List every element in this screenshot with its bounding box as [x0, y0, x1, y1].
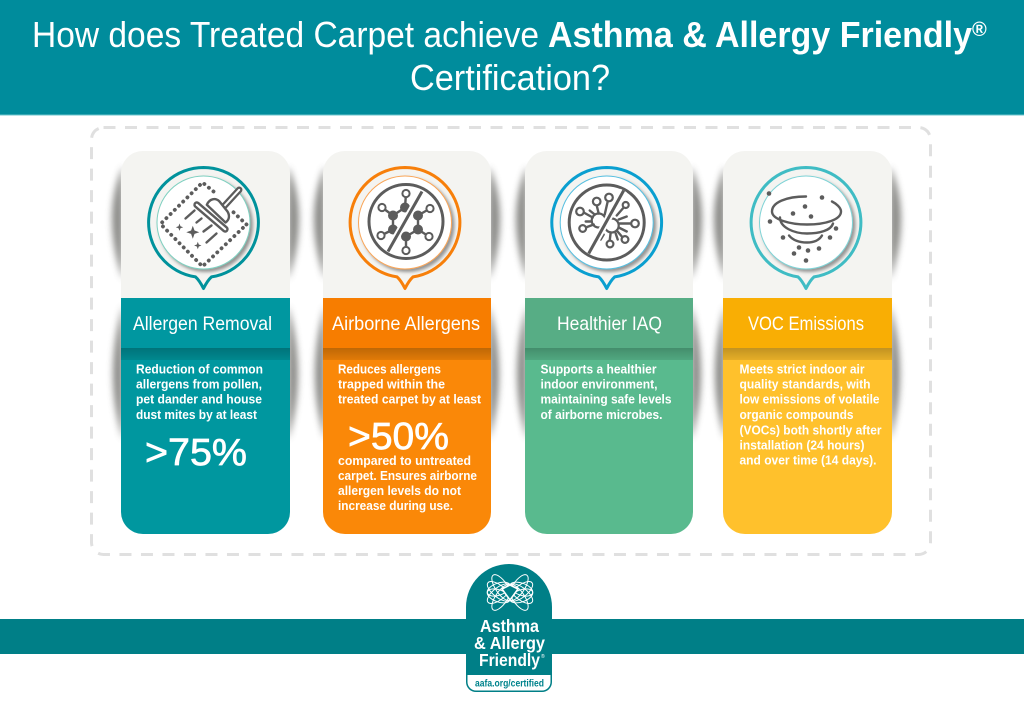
title: ®	[972, 19, 987, 41]
text block: maintaining safe levels	[540, 392, 672, 406]
text block: and over time (14 days).	[740, 452, 876, 468]
text block: allergen levels do not	[338, 483, 462, 498]
title banner	[0, 0, 1024, 116]
text block	[540, 362, 672, 422]
icon: no airborne molecules	[350, 168, 460, 288]
text block: pet dander and house	[136, 392, 262, 406]
heading: Airborne Allergens	[332, 313, 480, 335]
panel: Healthier IAQ	[525, 151, 693, 534]
text block: Meets strict indoor air	[740, 362, 864, 376]
text block: treated carpet by at least	[338, 392, 482, 406]
text block: Reduces allergens	[338, 362, 441, 376]
icon: VOC swirl	[751, 168, 861, 288]
title: Asthma & Allergy Friendly	[548, 14, 972, 55]
badge wordmark	[474, 616, 545, 670]
statistic: >50%	[348, 416, 449, 458]
icon: no microbes	[552, 168, 662, 288]
text block: Reduction of common	[136, 362, 263, 376]
text block: trapped within the	[338, 376, 445, 392]
text block: carpet. Ensures airborne	[338, 468, 477, 483]
text block: allergens from pollen,	[136, 376, 262, 392]
text block: dust mites by at least	[136, 407, 258, 422]
footer band	[0, 619, 1024, 654]
icon: badge logo	[484, 572, 536, 613]
title: How does Treated Carpet achieve	[32, 14, 539, 55]
text block: Supports a healthier	[540, 362, 656, 376]
certification badge	[466, 564, 552, 692]
text block: increase during use.	[338, 498, 453, 513]
title: Certification?	[410, 57, 610, 98]
badge wordmark: Asthma	[480, 616, 539, 636]
icon: carpet being mopped	[149, 168, 258, 288]
badge wordmark: & Allergy	[474, 633, 545, 653]
text block	[338, 362, 482, 406]
text block	[338, 453, 477, 513]
badge wordmark: ®	[541, 653, 545, 660]
heading: Allergen Removal	[133, 313, 272, 335]
badge wordmark: Friendly	[479, 650, 540, 670]
text block: installation (24 hours)	[740, 438, 864, 452]
text block: (VOCs) both shortly after	[740, 422, 882, 438]
text block: low emissions of volatile	[740, 392, 880, 406]
panel: VOC Emissions	[723, 151, 892, 534]
dashed frame	[92, 128, 930, 554]
heading: Healthier IAQ	[557, 313, 662, 335]
text block	[740, 362, 882, 468]
title	[32, 14, 987, 98]
text block: indoor environment,	[540, 376, 658, 392]
text block: of airborne microbes.	[540, 407, 662, 422]
heading: VOC Emissions	[748, 313, 864, 335]
panel: Airborne Allergens	[323, 151, 491, 534]
text block: quality standards, with	[740, 376, 871, 392]
statistic: >75%	[145, 432, 247, 474]
text block: compared to untreated	[338, 453, 471, 468]
panel: Allergen Removal	[121, 151, 290, 534]
badge url: aafa.org/certified	[475, 678, 544, 690]
text block: organic compounds	[740, 407, 854, 422]
text block	[136, 362, 263, 422]
